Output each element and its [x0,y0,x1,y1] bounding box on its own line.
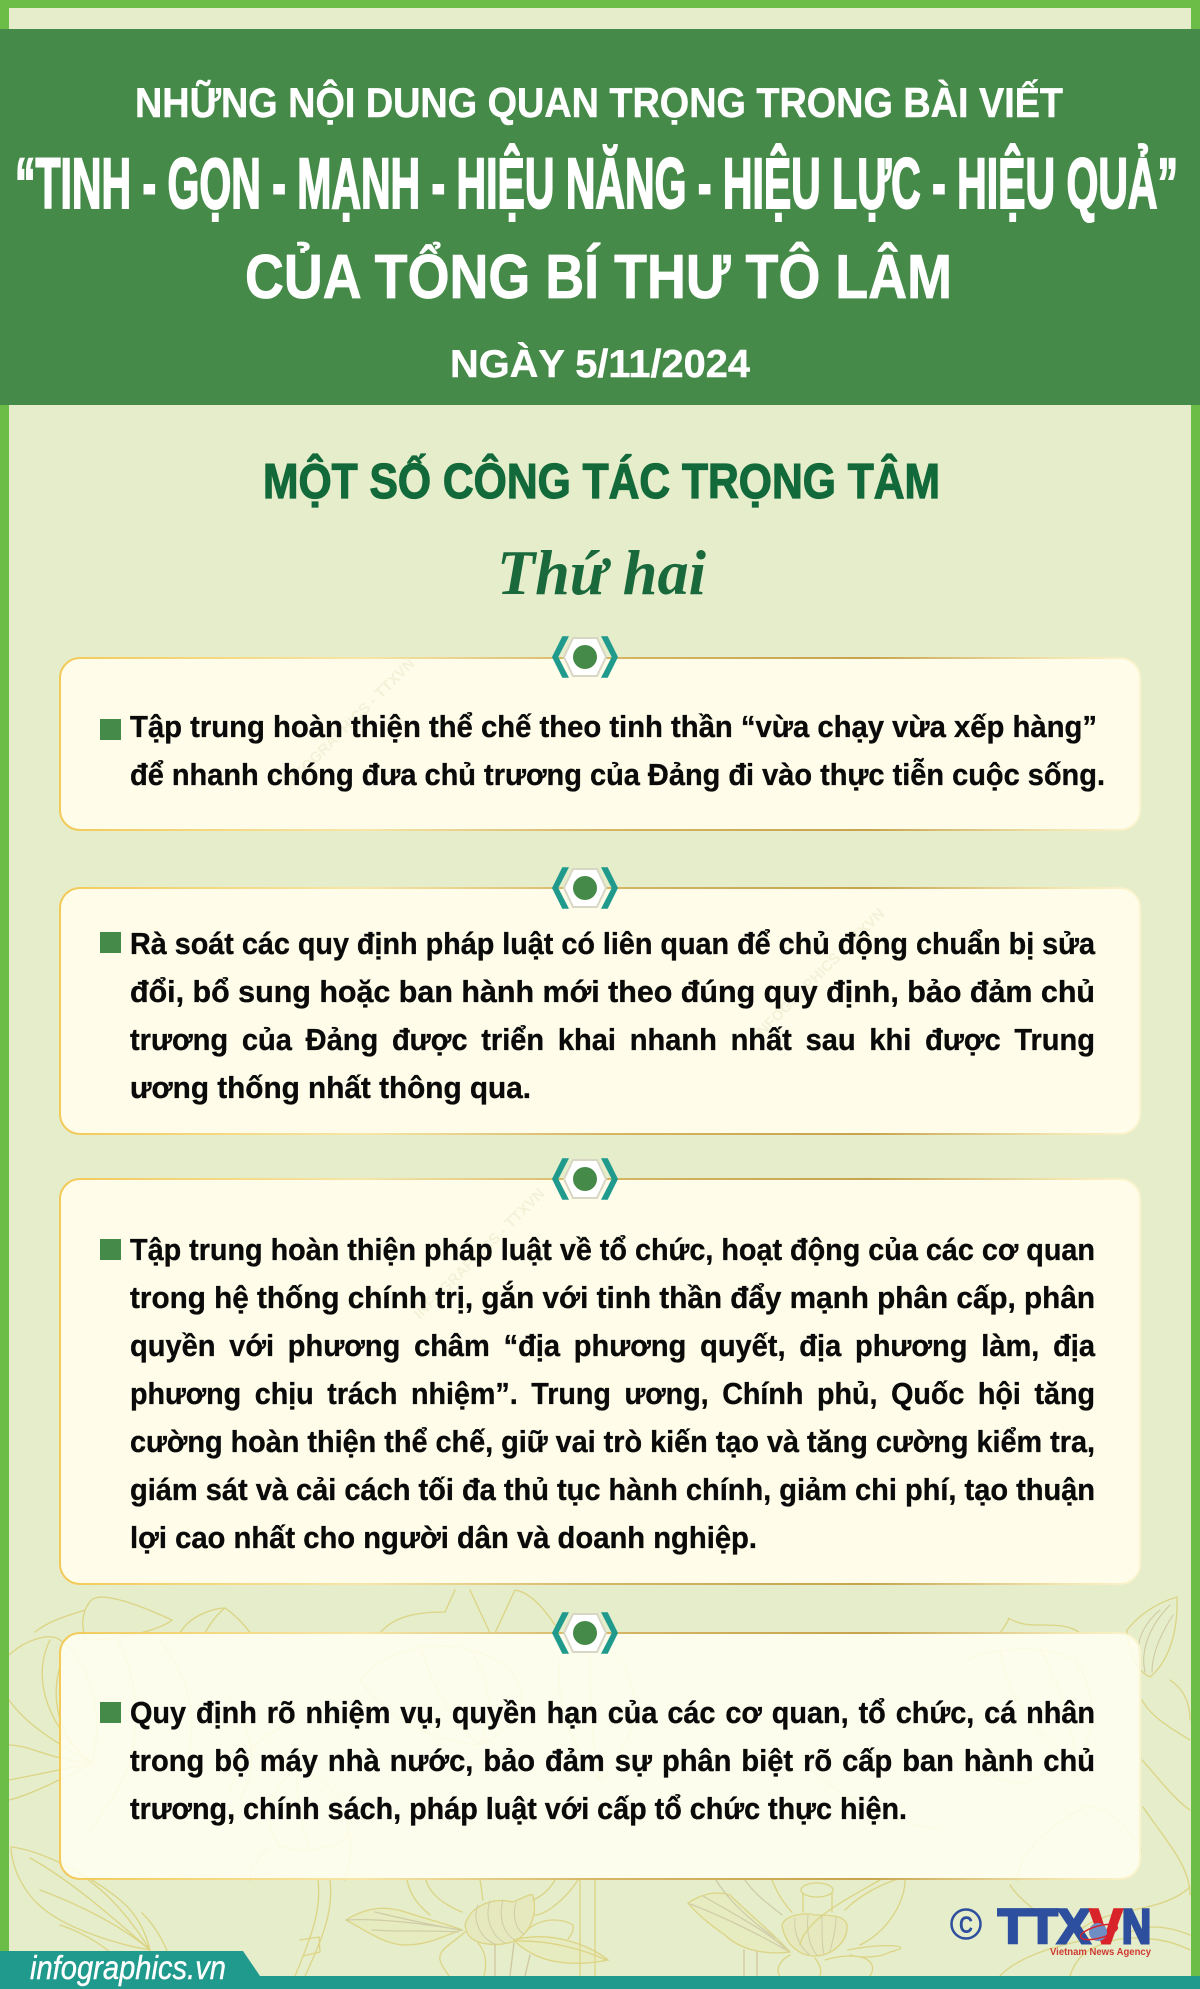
hexagon badge 1 [552,636,618,678]
agency wordmark: TTX [998,1901,1090,1954]
card 3 text: quyền với phương châm “địa phương quyết, địa phương làm, địa [130,1329,1096,1363]
card 2 text: Rà soát các quy định pháp luật có liên quan để chủ động chuẩn bị sửa [130,927,1096,961]
card 1 text: để nhanh chóng đưa chủ trương của Đảng đi vào thực tiễn cuộc sống. [130,757,1105,792]
panel: card 4 [60,1612,1140,1879]
watermark 3: INFOGRAPHICS - TTXVN [411,1185,548,1323]
watermark 2: INFOGRAPHICS - TTXVN [751,905,888,1043]
left edge strip [0,0,9,1989]
card 4 text: trong bộ máy nhà nước, bảo đảm sự phân biệt rõ cấp ban hành chủ [130,1744,1095,1778]
watermark 1: INFOGRAPHICS - TTXVN [281,655,418,793]
agency tagline: Vietnam News Agency [1050,1946,1151,1958]
agency wordmark: N [1122,1901,1151,1954]
title line 3: CỦA TỔNG BÍ THƯ TÔ LÂM [245,242,952,312]
card 3 text: trong hệ thống chính trị, gắn với tinh thần đẩy mạnh phân cấp, phân [130,1279,1095,1315]
card 3 text: giám sát và cải cách tối đa thủ tục hành chính, giảm chi phí, tạo thuận [130,1473,1095,1507]
card 3 text: phương chịu trách nhiệm”. Trung ương, Chính phủ, Quốc hội tăng [130,1377,1095,1411]
card 2 text: ương thống nhất thông qua. [130,1071,531,1105]
section heading: MỘT SỐ CÔNG TÁC TRỌNG TÂM [263,454,940,509]
title line 1: NHỮNG NỘI DUNG QUAN TRỌNG TRONG BÀI VIẾT [135,78,1063,126]
bullet 1 [100,719,121,740]
hexagon badge 3 [552,1158,618,1200]
hexagon badge 4 [552,1612,618,1654]
panel: card 3 [60,1158,1140,1584]
card 4 text [130,1696,1095,1826]
site name: infographics.vn [30,1949,226,1986]
bullet 2 [100,932,121,953]
card 4 text: trương, chính sách, pháp luật với cấp tổ chức thực hiện. [130,1792,907,1826]
section subheading: Thứ hai [497,537,706,608]
card 1 text [130,710,1105,792]
card 2 text [130,927,1096,1105]
header banner [0,29,1200,405]
background lotus line art [9,1590,1190,1976]
panel: card 1 [60,636,1140,830]
logo: TTXVN [952,1901,1151,1958]
right edge strip [1191,0,1200,1989]
card 3 text [130,1233,1096,1555]
hexagon badge 2 [552,867,618,909]
card 3 text: lợi cao nhất cho người dân và doanh nghiệp. [130,1521,757,1555]
card 4 text: Quy định rõ nhiệm vụ, quyền hạn của các cơ quan, tổ chức, cá nhân [130,1696,1095,1730]
date: NGÀY 5/11/2024 [450,342,750,386]
card 3 text: Tập trung hoàn thiện pháp luật về tổ chức, hoạt động của các cơ quan [130,1233,1095,1267]
agency wordmark: V [1090,1901,1122,1954]
card 1 text: Tập trung hoàn thiện thể chế theo tinh thần “vừa chạy vừa xếp hàng” [130,710,1097,744]
top edge strip [0,0,1200,8]
bullet 4 [100,1702,121,1723]
footer bar [0,1949,1200,1989]
copyright symbol [952,1910,980,1939]
agency wordmark [998,1901,1151,1954]
card 2 text: đổi, bổ sung hoặc ban hành mới theo đúng quy định, bảo đảm chủ [130,975,1095,1009]
bullet 3 [100,1239,121,1260]
footer tab [0,1951,260,1989]
card 2 text: trương của Đảng được triển khai nhanh nhất sau khi được Trung [130,1023,1095,1057]
card 3 text: cường hoàn thiện thể chế, giữ vai trò kiến tạo và tăng cường kiểm tra, [130,1425,1095,1459]
copyright symbol: C [959,1912,973,1939]
panel: card 2 [60,867,1140,1134]
